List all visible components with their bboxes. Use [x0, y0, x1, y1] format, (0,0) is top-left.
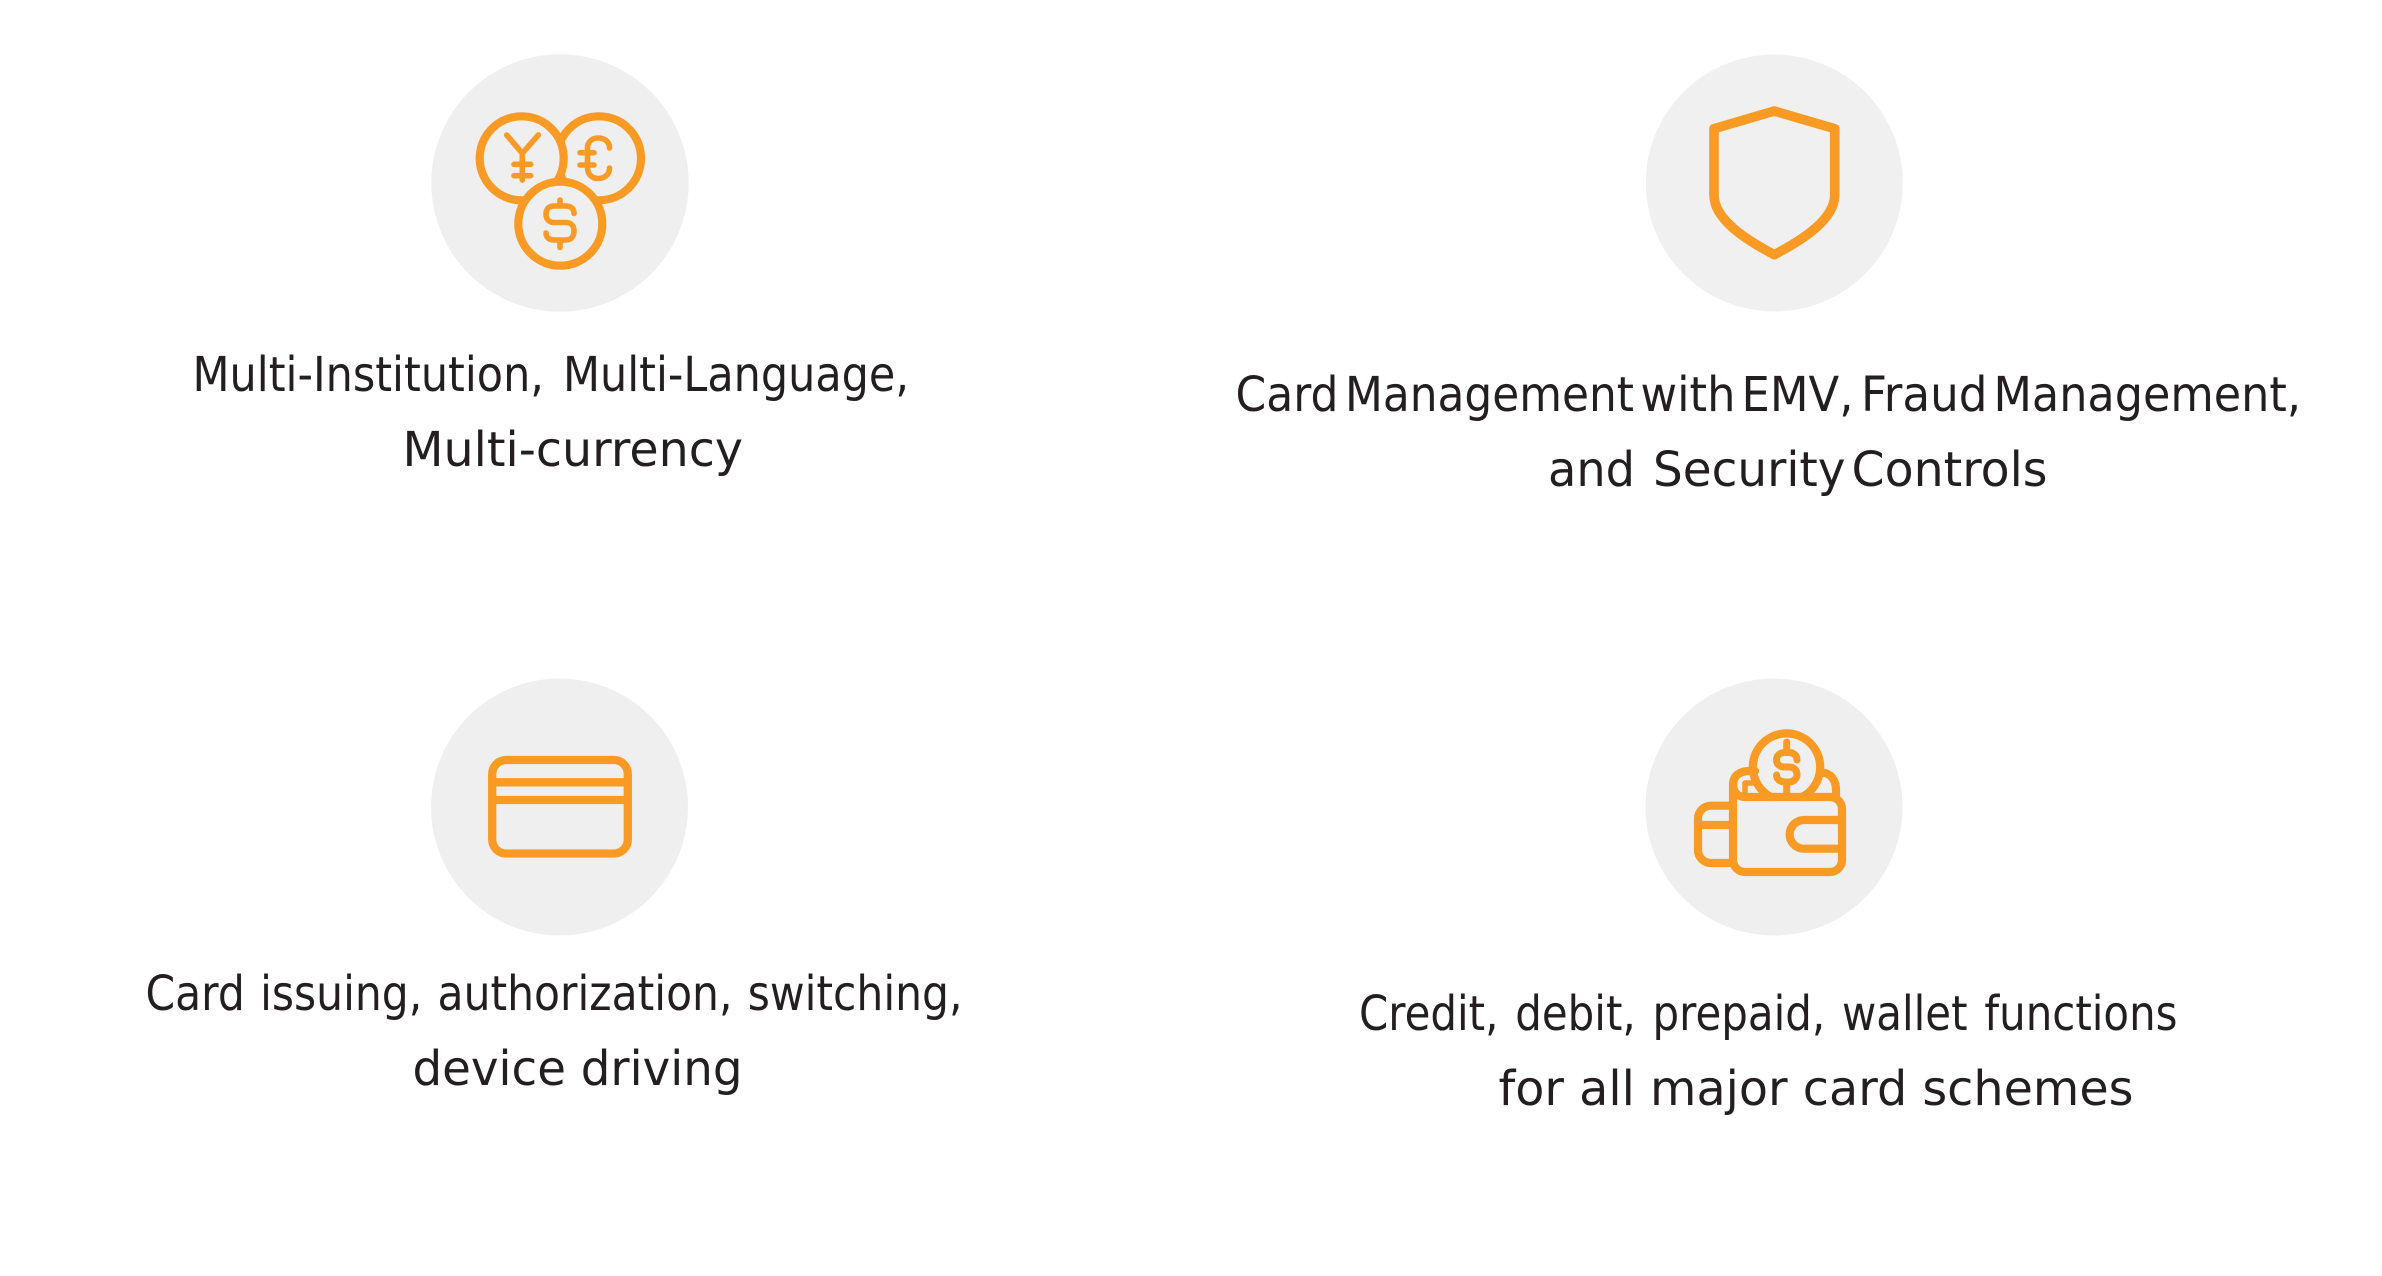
text: card management: Security — [1653, 442, 1846, 498]
icon: wallet with coin — [1646, 678, 1902, 936]
text: card management: Fraud — [1861, 367, 1988, 423]
text: card management: Management, — [1994, 367, 2301, 423]
icon: credit card — [431, 678, 688, 936]
text: card management — [1236, 367, 2301, 498]
text: card management: EMV, — [1742, 367, 1854, 423]
text: card issuing: device driving — [412, 1041, 742, 1097]
text: multi-institution: Multi-currency — [402, 422, 743, 478]
text: multi-institution: Multi-Institution, Multi-Language, — [192, 347, 909, 403]
panel: card management — [1236, 54, 2301, 498]
text: card management: and — [1548, 442, 1635, 498]
text: card issuing — [146, 966, 962, 1097]
text: credit debit prepaid — [1359, 986, 2178, 1117]
icon: currency coins — [431, 54, 689, 312]
text: card management: Card — [1236, 367, 1338, 423]
text: card management: Controls — [1852, 442, 2048, 498]
text: card issuing: Card issuing, authorization, switching, — [146, 966, 962, 1022]
text: card management: Management — [1345, 367, 1634, 423]
text: credit debit prepaid: for all major card schemes — [1498, 1061, 2134, 1117]
panel: multi-institution — [192, 54, 909, 478]
panel: card issuing — [146, 678, 962, 1097]
text: card management: with — [1640, 367, 1736, 423]
text: credit debit prepaid: Credit, debit, prepaid, wallet functions — [1359, 986, 2178, 1042]
panel: credit debit prepaid — [1359, 678, 2178, 1117]
text: multi-institution — [192, 347, 909, 478]
icon: shield — [1646, 54, 1903, 312]
